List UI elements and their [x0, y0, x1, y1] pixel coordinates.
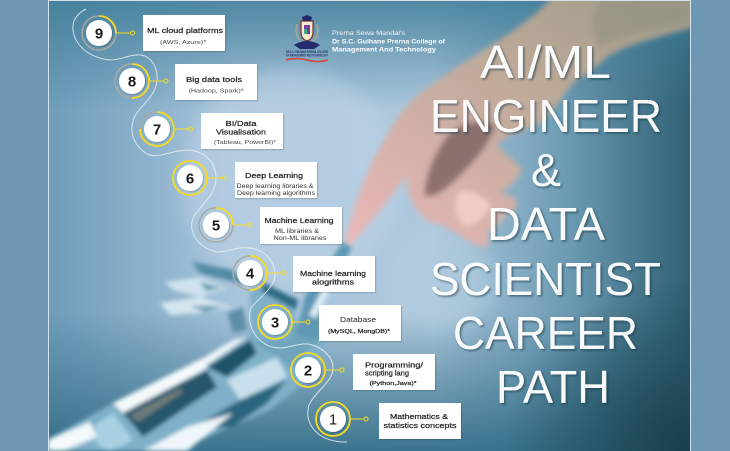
title: & — [531, 144, 561, 196]
step 9 — [82, 15, 225, 51]
logo: college crest — [286, 15, 329, 62]
step 3 — [258, 305, 401, 341]
title: SCIENTIST — [430, 253, 661, 305]
step 8: 8 — [128, 74, 136, 90]
step 7: 7 — [153, 122, 161, 138]
step 2: (Python,Java)* — [370, 381, 418, 387]
step 1: 1 — [329, 412, 337, 428]
college name — [332, 30, 446, 54]
title — [430, 36, 662, 413]
step 7: (Tableau, PowerBI)* — [214, 140, 277, 146]
step 6: Deep learning libraries & — [236, 184, 314, 190]
step 6: Deep Learning — [245, 171, 303, 180]
step 4: alogrithms — [312, 278, 354, 286]
step 3: Database — [340, 315, 376, 324]
step 5: Non-ML libraries — [274, 235, 326, 242]
step 9: 9 — [95, 26, 103, 42]
title: PATH — [496, 361, 610, 413]
step 2: 2 — [304, 362, 312, 380]
step 4 — [233, 256, 375, 292]
step 8: Big data tools — [186, 75, 242, 84]
college name: Prerna Sewa Mandal's — [332, 30, 405, 37]
step 5: 5 — [212, 218, 220, 234]
step 7: Visualisation — [216, 128, 266, 136]
step 2: Programming/ — [365, 360, 424, 370]
step 7 — [140, 112, 283, 149]
step 4: 4 — [246, 266, 255, 282]
college name: Management And Technology — [332, 46, 437, 54]
upper digit — [296, 242, 352, 340]
palm — [250, 283, 297, 340]
title: AI/ML — [480, 36, 611, 88]
step 9: ML cloud platforms — [147, 26, 223, 35]
step 2: scripting lang — [365, 368, 409, 378]
photo: robot arm — [48, 242, 352, 451]
step 2 — [291, 353, 435, 390]
step 6: 6 — [186, 170, 194, 188]
photo: human hand — [345, 0, 700, 248]
logo: college crest: OF MANAGEMENT AND TECHNOLOGY — [286, 54, 329, 58]
step 8: (Hadoop, Spark)* — [188, 88, 245, 94]
college name: Dr S.C. Gulhane Prerna College of — [332, 38, 446, 46]
step 6: Deep learning algorithms — [237, 191, 315, 197]
step 8 — [115, 64, 257, 100]
step 3: (MySQL, MongDB)* — [328, 329, 391, 335]
arm silhouette — [49, 320, 330, 451]
title: CAREER — [453, 307, 638, 359]
step 5: Machine Learning — [264, 216, 334, 225]
step 7: BI/Data — [226, 119, 257, 128]
step 5 — [199, 207, 342, 244]
robot fingers — [192, 262, 245, 285]
step 1: statistics concepts — [384, 421, 457, 430]
step 1 — [316, 402, 461, 439]
step 6 — [173, 161, 317, 198]
winding path — [73, 9, 347, 442]
logo: college crest: DR.S.C. GULHANE PRERNA COLLEGE — [286, 50, 328, 54]
title: ENGINEER — [430, 90, 662, 142]
step 1: Mathematics & — [390, 412, 448, 421]
step 3: 3 — [271, 314, 279, 332]
step 9: (AWS, Azure)* — [160, 40, 207, 46]
title: DATA — [487, 198, 605, 250]
step 5: ML libraries & — [275, 228, 320, 235]
step 4: Machine learning — [300, 269, 366, 278]
